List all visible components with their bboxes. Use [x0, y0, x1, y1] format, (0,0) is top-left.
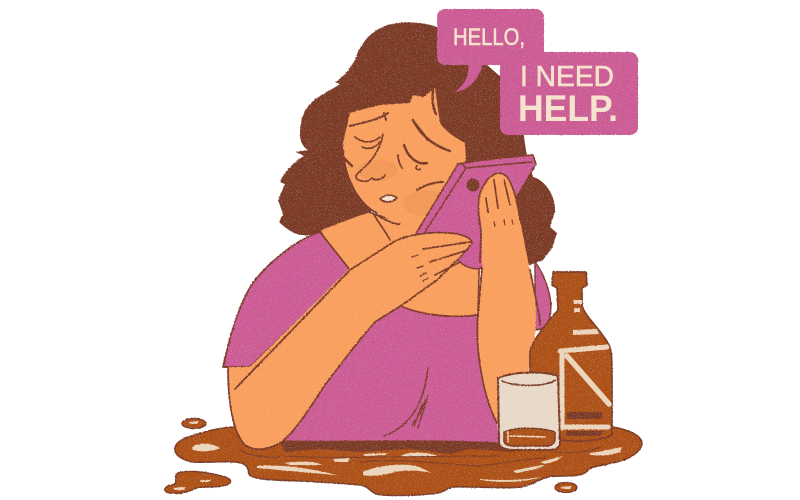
left arm and hand [228, 233, 472, 449]
puddle highlights [192, 444, 622, 482]
mouth [380, 195, 397, 202]
bottle highlights [573, 300, 599, 335]
neckline and shirt edge lines [283, 232, 499, 444]
text: hello: HELLO, [453, 24, 525, 51]
shirt body [283, 305, 499, 443]
text: help: HELP. [518, 88, 618, 129]
dark shadow under shirt [280, 442, 515, 454]
small puddle splashes [165, 418, 577, 493]
puddle [175, 427, 642, 496]
right shirt sliver [535, 262, 551, 330]
neck and chest [320, 212, 480, 318]
phone edges [425, 162, 532, 232]
face features [343, 90, 450, 240]
bottle label [560, 347, 609, 428]
shirt sleeve left [223, 232, 350, 367]
speech bubble tail [455, 62, 483, 92]
glass [498, 372, 560, 450]
left arm outline [228, 233, 472, 449]
whisky in glass [504, 428, 555, 446]
text: i need: I NEED [520, 61, 614, 93]
hair [278, 22, 557, 265]
bottle [530, 272, 612, 441]
phone [415, 155, 536, 269]
bottle label band [566, 412, 603, 436]
face shading [358, 159, 447, 216]
speech bubble: i need help [500, 52, 638, 135]
right arm outlines [477, 173, 540, 423]
speech bubble: hello [437, 9, 544, 65]
phone camera [466, 178, 480, 192]
face [343, 88, 466, 229]
glass rim [502, 380, 556, 385]
puddle ripples [240, 447, 600, 466]
right arm and raised hand [477, 173, 536, 430]
